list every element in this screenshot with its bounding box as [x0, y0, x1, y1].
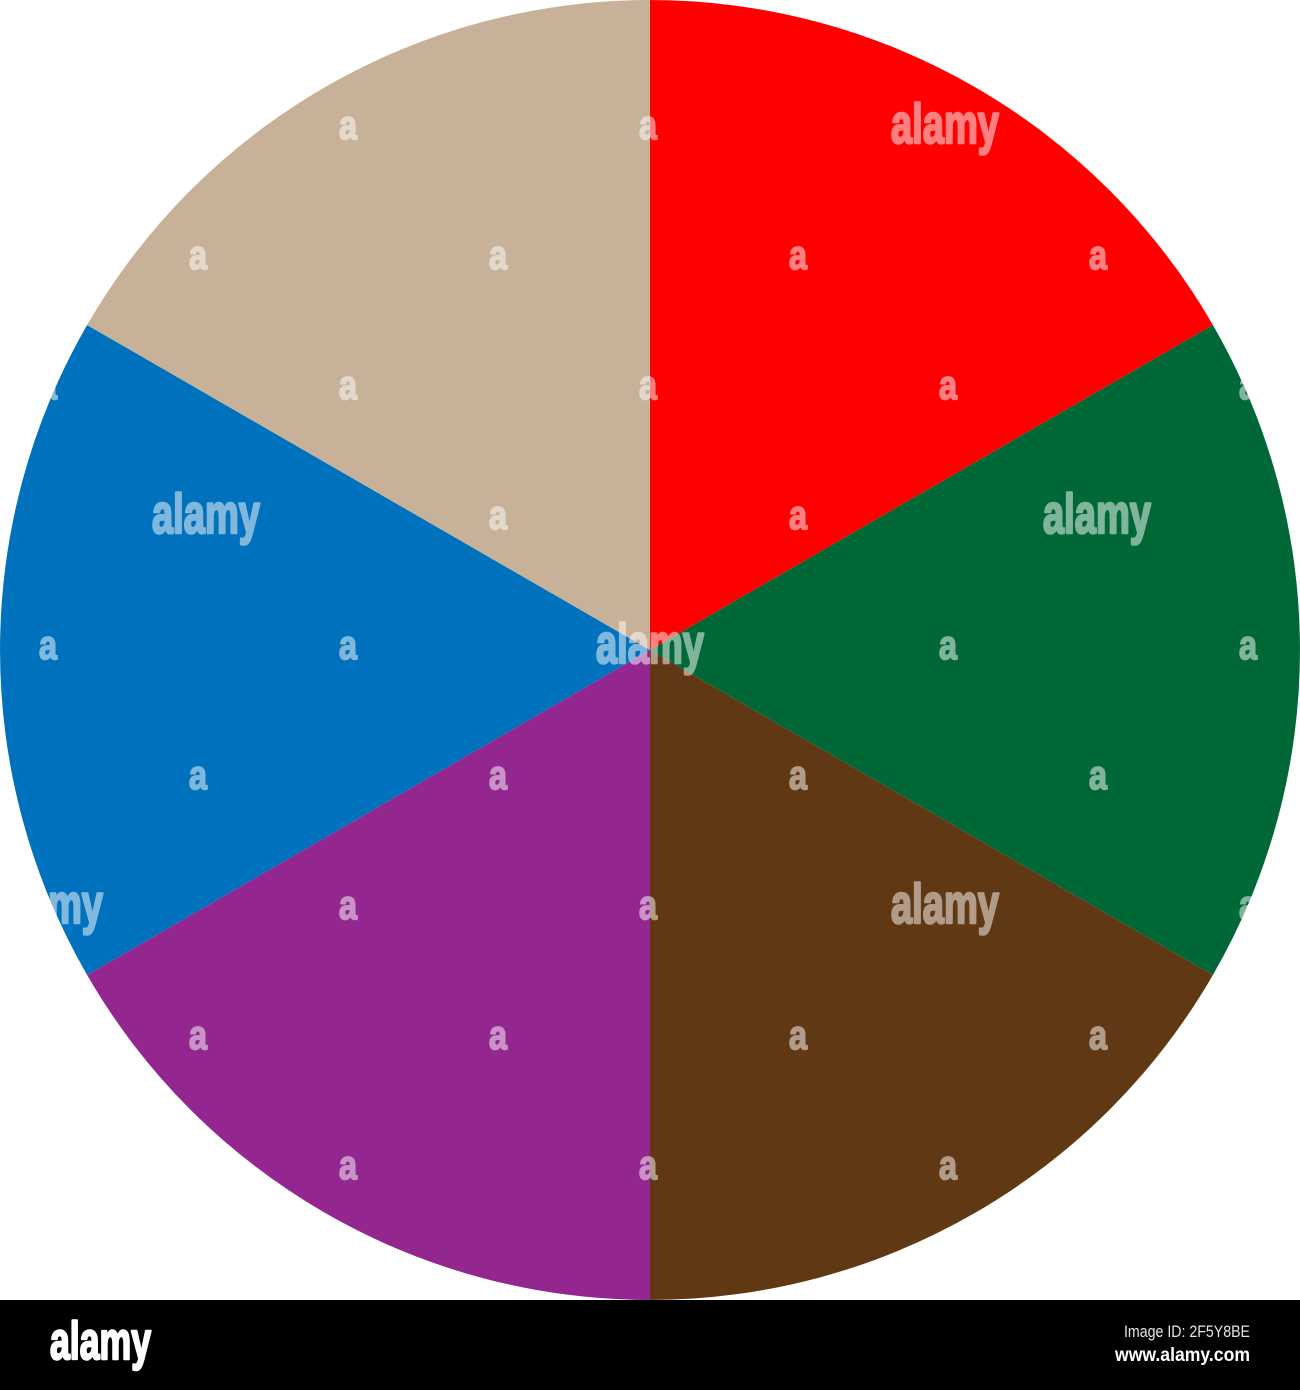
watermark small letters: a: [1089, 232, 1108, 278]
watermark logos: [0, 92, 1151, 935]
watermark logos: alamy: [152, 482, 260, 545]
watermark small letters: a: [489, 752, 508, 798]
footer bar: [0, 1300, 1300, 1390]
watermark small letters: [39, 102, 1258, 1188]
watermark small letters: a: [189, 1012, 208, 1058]
segment: red: [650, 0, 1213, 650]
watermark small letters: a: [1089, 752, 1108, 798]
watermark small letters: a: [39, 622, 58, 668]
watermark small letters: a: [1239, 362, 1258, 408]
watermark small letters: a: [339, 102, 358, 148]
watermark small letters: a: [789, 1012, 808, 1058]
watermark small letters: a: [339, 1142, 358, 1188]
segment: purple: [87, 650, 650, 1300]
watermark small letters: a: [639, 102, 658, 148]
segment: tan: [87, 0, 650, 650]
watermark small letters: a: [1239, 882, 1258, 928]
segment: blue: [0, 325, 650, 975]
watermark small letters: a: [939, 1142, 958, 1188]
watermark small letters: a: [339, 362, 358, 408]
watermark small letters: a: [489, 232, 508, 278]
watermark small letters: a: [639, 882, 658, 928]
footer logo: alamy: [50, 1312, 151, 1371]
watermark logos: alamy: [891, 92, 999, 155]
watermark small letters: a: [939, 622, 958, 668]
watermark small letters: a: [489, 1012, 508, 1058]
watermark small letters: a: [489, 492, 508, 538]
watermark small letters: a: [789, 232, 808, 278]
website: www.alamy.com: [1114, 1345, 1250, 1366]
watermark small letters: a: [189, 232, 208, 278]
watermark overlay clipped to the circle: [0, 92, 1258, 1188]
watermark small letters: a: [39, 362, 58, 408]
watermark small letters: a: [639, 1142, 658, 1188]
watermark logos: alamy: [1043, 482, 1151, 545]
watermark small letters: a: [339, 882, 358, 928]
watermark small letters: a: [1239, 622, 1258, 668]
image id: Image ID: 2F5Y8BE: [1124, 1322, 1250, 1341]
segment: green: [650, 325, 1300, 975]
watermark small letters: a: [639, 362, 658, 408]
segment: brown: [650, 650, 1213, 1300]
watermark small letters: a: [189, 752, 208, 798]
watermark logos: alamy: [596, 612, 704, 675]
watermark small letters: a: [939, 362, 958, 408]
watermark small letters: a: [339, 622, 358, 668]
watermark small letters: a: [789, 752, 808, 798]
watermark small letters: a: [1089, 1012, 1108, 1058]
watermark small letters: a: [789, 492, 808, 538]
watermark logos: alamy: [891, 872, 999, 935]
